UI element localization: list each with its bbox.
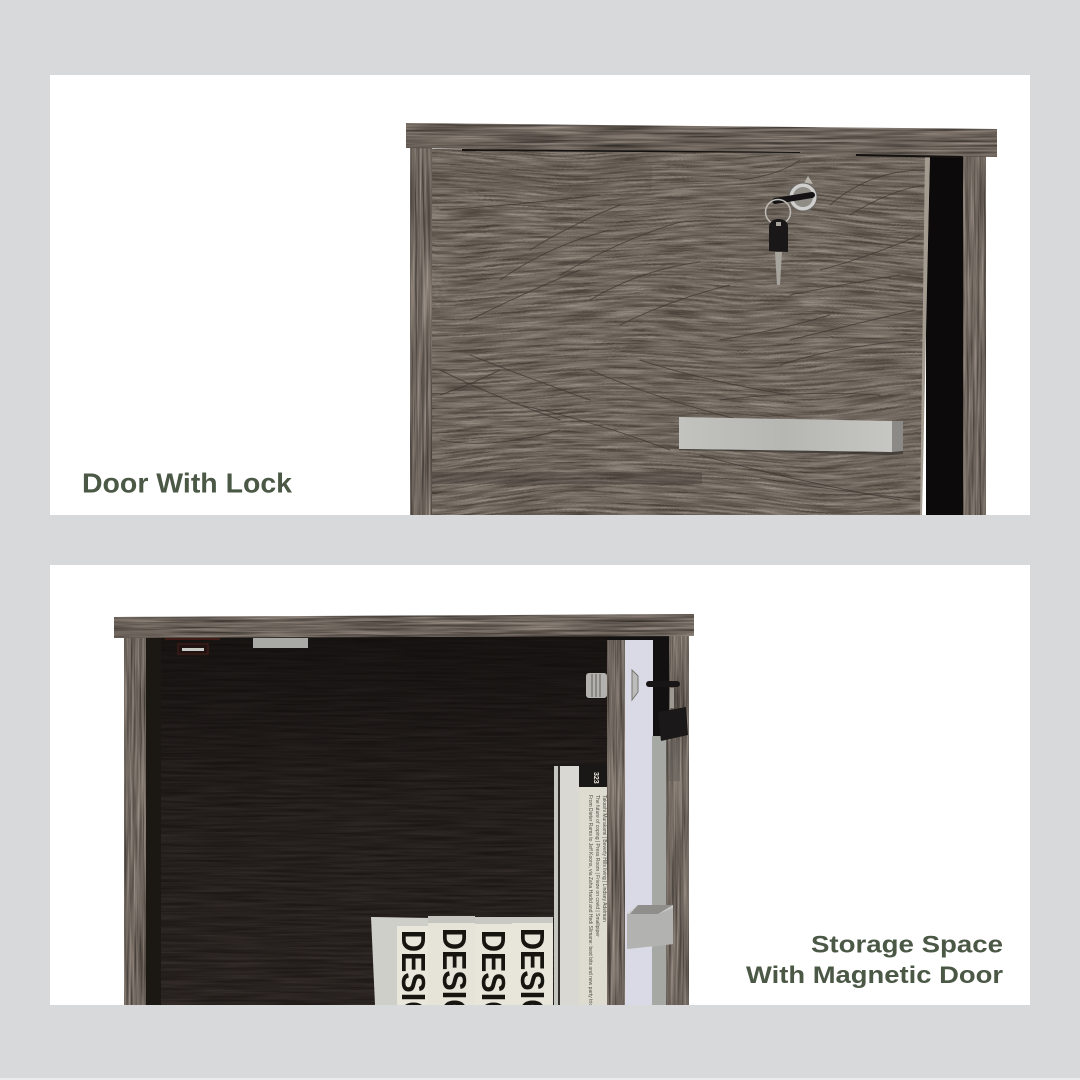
icon: key on ring <box>766 200 790 285</box>
icon: key hanging <box>646 681 688 781</box>
books: short row <box>371 916 553 1005</box>
door handle <box>679 417 903 455</box>
right post <box>963 152 986 515</box>
bracket <box>627 905 673 949</box>
books: tall row: 323 <box>592 772 599 784</box>
books: short row: DESIG <box>514 928 551 1023</box>
door right edge <box>920 154 930 515</box>
magnetic catch <box>165 638 220 654</box>
left post <box>410 146 432 515</box>
icon: lock cylinder <box>775 176 817 211</box>
left post <box>124 636 146 1005</box>
dark interior back wall <box>145 636 611 1005</box>
cabinet: open door with books <box>114 614 694 1025</box>
door panel <box>432 149 932 515</box>
cabinet: closed door with lock <box>406 123 998 515</box>
heading: door with lock: Door With Lock <box>82 468 292 498</box>
books: short row: DESIG <box>475 930 512 1025</box>
top board <box>114 614 694 638</box>
black interior gap <box>926 156 963 515</box>
lock cylinder <box>586 670 638 700</box>
panel: door with lock <box>50 75 1030 515</box>
book 4 <box>512 917 553 1005</box>
heading: storage space with magnetic door: Storage Space <box>811 932 1003 958</box>
shadow below top <box>462 149 800 153</box>
books: tall row: The future of coping | Press Room | Frieze on covid | Smallpiper <box>594 795 600 937</box>
book 2 <box>428 916 475 1005</box>
catch plate <box>253 638 308 648</box>
right post <box>669 636 689 1005</box>
top board <box>406 123 998 157</box>
open door edge <box>607 640 625 1005</box>
books: tall row: Takashi Murakami | Beverly Hills living | Lindsey Adelman <box>601 795 607 922</box>
books: short row: DESIG <box>436 928 473 1023</box>
books: tall row: From Dieter Rams to Jeff Koons, via Zaha Hadid and Hedi Slimane: best bits and new party tricks <box>587 795 593 1011</box>
door grain strokes <box>440 160 925 500</box>
books: short row: DESIG <box>395 930 432 1025</box>
book 1 <box>371 917 431 1005</box>
panel: storage space with magnetic door <box>50 565 1030 1025</box>
books: tall row <box>554 764 607 1011</box>
book 3 <box>475 924 512 1005</box>
heading: storage space with magnetic door: With Magnetic Door <box>746 962 1003 989</box>
heading: storage space with magnetic door <box>746 932 1003 989</box>
open door inner face <box>625 640 653 1005</box>
